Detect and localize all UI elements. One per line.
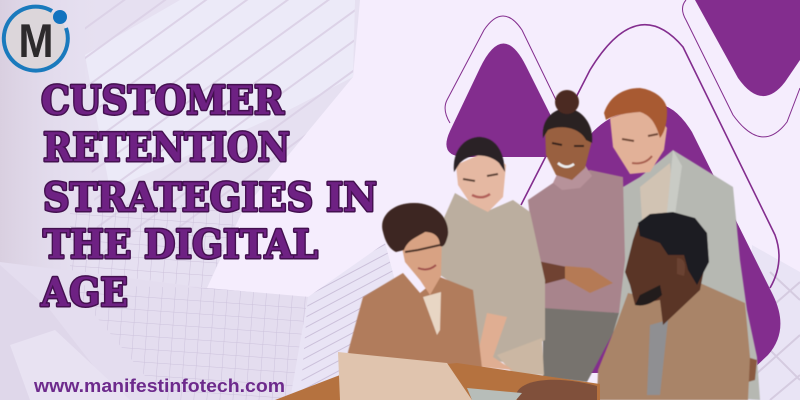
person: curly-haired woman <box>347 203 482 368</box>
triangle outline: middle <box>521 25 779 288</box>
triangle: filled top right <box>695 0 800 96</box>
person: man in tan blazer <box>597 212 750 400</box>
table <box>275 363 600 400</box>
logo: M <box>18 14 54 67</box>
title <box>40 78 377 316</box>
person: redhead man <box>604 88 760 400</box>
hand on table <box>517 380 597 400</box>
building photo: upper left <box>0 0 360 288</box>
person: woman with bun <box>528 90 625 382</box>
people group photo <box>347 88 760 400</box>
person: woman in grey sweater <box>440 137 545 375</box>
triangle outline: left <box>445 16 556 123</box>
triangle: filled left <box>446 43 552 157</box>
triangle: filled right <box>540 104 780 373</box>
building photo: lower right <box>745 245 800 400</box>
building photo: lower left <box>0 243 400 400</box>
title: AGE <box>40 270 128 316</box>
logo <box>4 7 68 71</box>
laptop <box>338 352 522 400</box>
title: RETENTION <box>43 125 290 171</box>
title: STRATEGIES IN <box>43 175 377 221</box>
decorative purple triangles <box>445 0 800 373</box>
title: CUSTOMER <box>41 78 285 124</box>
title: THE DIGITAL <box>43 222 318 268</box>
triangle outline: top right <box>682 0 800 137</box>
website url: www.manifestinfotech.com <box>33 376 285 396</box>
